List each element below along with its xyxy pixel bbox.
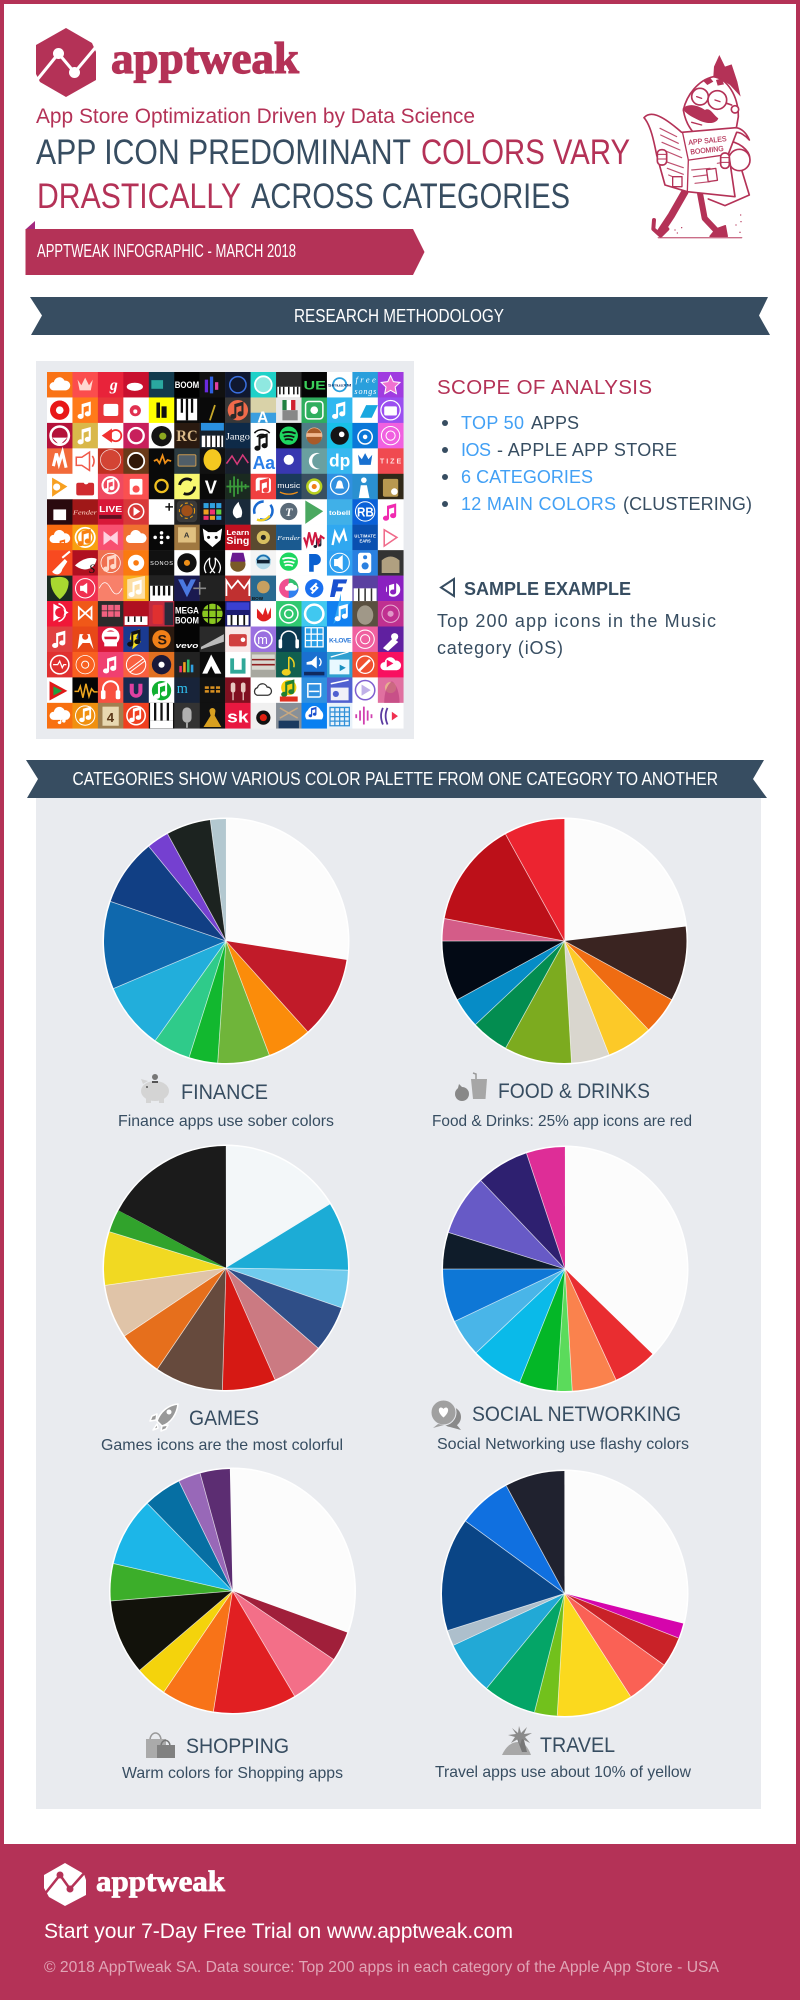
pie chart: shopping [109, 1468, 356, 1714]
footer logo: apptweak [44, 1863, 225, 1906]
list: analysis scope bullets: IOS [461, 440, 491, 460]
panel: sample app icon grid: Fender [276, 535, 301, 542]
panel: sample app icon grid: A [257, 409, 268, 426]
panel: sample app icon grid: S [89, 562, 95, 576]
pie chart: games [102, 1144, 350, 1392]
label: social networking: Social Networking use flashy colors [437, 1436, 689, 1453]
ribbon: infographic date: APPTWEAK INFOGRAPHIC - MARCH 2018 [37, 241, 296, 261]
text block: scope of analysis [437, 376, 752, 514]
label: games [101, 1407, 343, 1454]
pie chart: social networking [442, 1146, 688, 1392]
mascot: man reading newspaper [644, 55, 750, 238]
icon: rocket [150, 1404, 178, 1431]
label: travel: TRAVEL [540, 1734, 615, 1757]
logo: apptweak [36, 28, 300, 97]
label: travel: Travel apps use about 10% of yellow [435, 1764, 691, 1781]
text block: sample example [437, 579, 716, 658]
panel: sample app icon grid [36, 361, 414, 739]
label: finance: Finance apps use sober colors [118, 1113, 334, 1130]
panel: sample app icon grid: songs [354, 387, 376, 396]
logo: apptweak: apptweak [111, 34, 300, 83]
panel: sample app icon grid: K-LOVE [329, 637, 352, 644]
list: analysis scope bullets: (CLUSTERING) [623, 494, 752, 514]
panel: sample app icon grid: UE [304, 379, 326, 392]
panel: sample app icon grid: 4 [107, 710, 115, 725]
list: analysis scope bullets: 6 CATEGORIES [461, 467, 593, 487]
list: analysis scope bullets: TOP 50 [461, 413, 524, 433]
icon: palm tree island [502, 1726, 532, 1755]
label: food and drinks: FOOD & DRINKS [498, 1080, 650, 1103]
icon: piggy bank [141, 1074, 169, 1103]
panel: sample app icon grid: g [109, 377, 118, 394]
label: shopping: SHOPPING [186, 1735, 289, 1758]
panel: sample app icon grid: EARS [360, 539, 371, 544]
footer logo: apptweak: apptweak [96, 1865, 225, 1898]
panel: sample app icon grid: V [205, 477, 218, 498]
panel: sample app icon grid: LIVE [99, 505, 123, 514]
label: games: Games icons are the most colorful [101, 1437, 343, 1454]
panel: sample app icon grid: RB [357, 505, 374, 520]
main title: COLORS VARY [421, 133, 630, 172]
panel: sample app icon grid: S [157, 632, 167, 648]
pie chart: travel [440, 1470, 688, 1718]
footer copyright: © 2018 AppTweak SA. Data source: Top 200 apps in each category of the Apple App Store - USA [44, 1959, 720, 1976]
mascot: man reading newspaper: BOOMING [690, 144, 724, 156]
label: shopping: Warm colors for Shopping apps [122, 1765, 343, 1782]
panel: sample app icon grid: T [285, 506, 293, 519]
mascot: man reading newspaper: APP SALES [688, 134, 727, 147]
label: games: GAMES [189, 1407, 259, 1430]
panel: categories background [36, 798, 761, 1809]
panel: sample app icon grid: MEGA [175, 605, 199, 615]
panel: sample app icon grid: A [184, 530, 190, 539]
list: analysis scope bullets: APPS [531, 413, 579, 433]
panel: sample app icon grid: BOOM [175, 380, 200, 390]
text block: sample example: Top 200 app icons in the Music [437, 611, 716, 631]
panel: sample app icon grid: music [277, 481, 300, 490]
icon: pear and drink [455, 1073, 487, 1101]
label: social networking: SOCIAL NETWORKING [472, 1403, 681, 1426]
panel: sample app icon grid: sk [227, 709, 250, 727]
label: social networking [437, 1403, 689, 1453]
panel: sample app icon grid: BOOM [175, 615, 199, 625]
panel: sample app icon grid: m [257, 632, 268, 647]
main title: ACROSS CATEGORIES [251, 177, 570, 216]
ribbon: infographic date [26, 221, 424, 275]
label: shopping [122, 1735, 343, 1782]
main title [36, 133, 630, 216]
text block: scope of analysis: SCOPE OF ANALYSIS [437, 376, 652, 399]
panel: sample app icon grid: Jango [226, 431, 250, 441]
pie chart: finance [102, 818, 350, 1064]
list: analysis scope bullets [442, 413, 752, 514]
panel: sample app icon grid: free [355, 375, 376, 385]
banner: categories heading [26, 760, 767, 798]
banner: research methodology [30, 297, 770, 335]
panel: sample app icon grid: TIZE [380, 458, 402, 466]
panel: sample app icon grid: SiriusXM [328, 383, 351, 387]
panel: sample app icon grid: RC [176, 428, 198, 445]
panel: sample app icon grid: BOW [252, 596, 264, 601]
text block: sample example: category (iOS) [437, 638, 563, 658]
list: analysis scope bullets: 12 MAIN COLORS [461, 494, 616, 514]
main title: APP ICON PREDOMINANT [36, 133, 411, 172]
label: finance [118, 1081, 334, 1130]
icon: chat bubbles with heart [431, 1400, 461, 1430]
banner: research methodology: RESEARCH METHODOLOGY [294, 306, 504, 326]
label: travel [435, 1734, 691, 1781]
pie chart: food and drinks [441, 818, 688, 1064]
panel: sample app icon grid: m [177, 681, 188, 697]
label: finance: FINANCE [181, 1081, 268, 1104]
label: food and drinks: Food & Drinks: 25% app icons are red [432, 1113, 692, 1130]
panel: sample app icon grid: Sing [226, 536, 249, 547]
panel: sample app icon grid: Fender [72, 510, 97, 517]
text block: sample example: SAMPLE EXAMPLE [464, 579, 631, 599]
label: food and drinks [432, 1080, 692, 1130]
tagline: App Store Optimization Driven by Data Science [36, 105, 475, 128]
list: analysis scope bullets: - APPLE APP STORE [497, 440, 677, 460]
main title: DRASTICALLY [37, 177, 241, 216]
footer call to action: Start your 7-Day Free Trial on www.apptweak.com [44, 1920, 513, 1943]
icon: left triangle [441, 579, 454, 596]
icon: shopping bags [146, 1733, 175, 1758]
panel: sample app icon grid: tobell [329, 510, 351, 517]
panel: sample app icon grid: dp [329, 451, 350, 471]
banner: categories heading: CATEGORIES SHOW VARIOUS COLOR PALETTE FROM ONE CATEGORY TO ANOTHER [72, 769, 718, 789]
panel: sample app icon grid: Aa [253, 452, 276, 473]
panel: sample app icon grid: Learn [226, 529, 249, 537]
panel: sample app icon grid: vevo [176, 641, 199, 650]
panel: sample app icon grid: ULTIMATE [354, 533, 376, 538]
panel: sample app icon grid: SONOS [150, 561, 173, 567]
